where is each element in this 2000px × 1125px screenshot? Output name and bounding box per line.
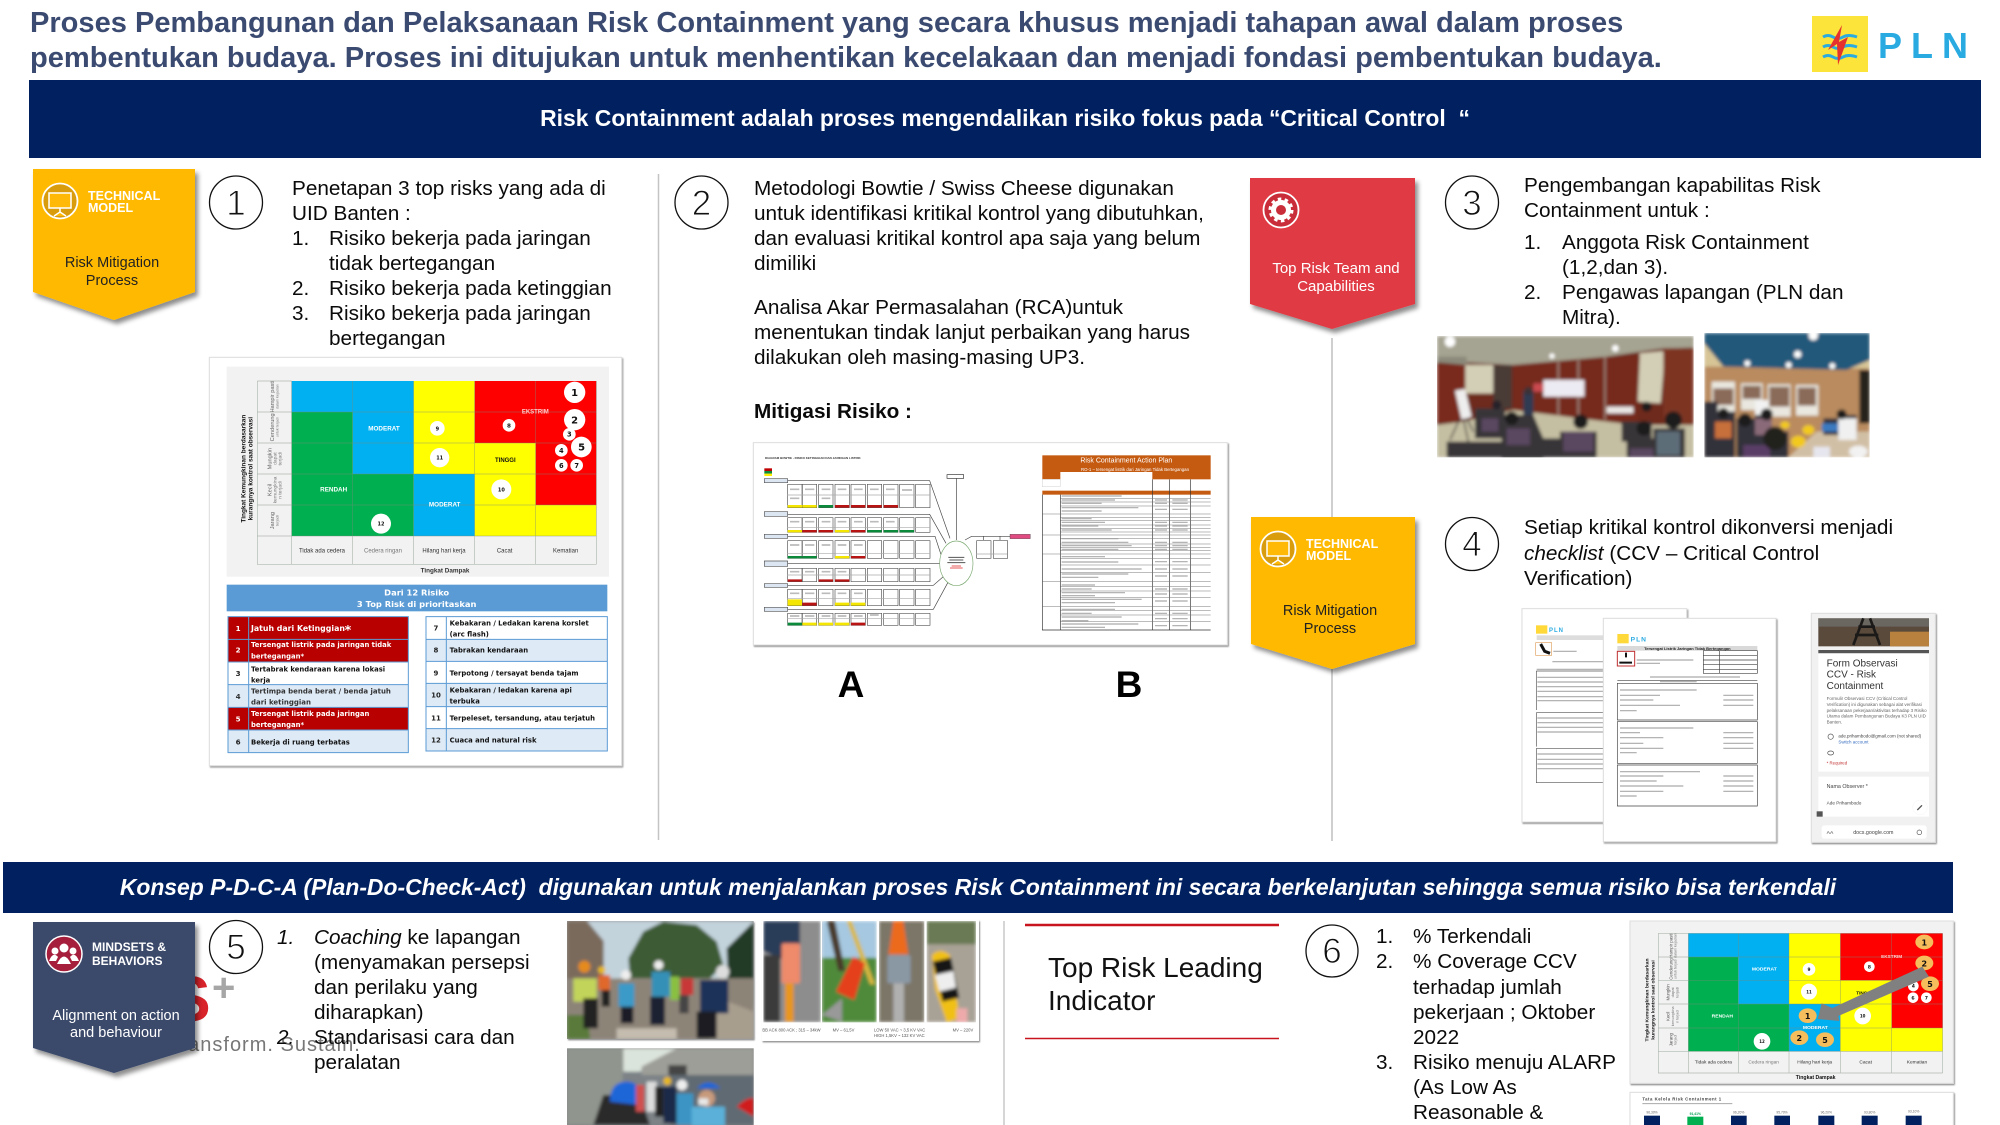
chart: matrix cells [241,381,596,574]
label: B: B [1116,664,1142,705]
chart: matrix cells: n terjadi [277,481,283,499]
step number 4: 4 [1462,525,1482,564]
panel: technical model badge 1: MODEL [88,201,134,215]
title: Proses Pembangunan dan Pelaksanaan Risk Containment yang secara khusus menjadi tahapan awal dalam proses [30,7,1623,39]
chart: matrix cells: 7 [1925,995,1928,1001]
text block: step 2: Metodologi Bowtie / Swiss Cheese digunakan [754,177,1174,200]
table: risks 7 to 12: 8 [434,647,439,655]
chart: top risk bars: 93,80% [1864,1111,1875,1115]
table: risks 1 to 6: 4 [236,692,241,701]
chart: matrix cells: RENDAH [320,486,348,493]
chart: matrix cells: Tingkat Kemungkinan berdasarkan [241,415,248,523]
chart: matrix cells: Hampir pasti [270,381,276,413]
chart: matrix cells: Cacat [1859,1060,1873,1066]
table: risks 1 to 6: dari ketinggian [251,698,311,706]
panel: technical model badge 2: Process [1304,621,1356,637]
chart: matrix cells: Hilang hari kerja [422,548,466,554]
table: risks 7 to 12: 10 [431,692,441,700]
text block: step 2 [754,177,1204,369]
chart: matrix cells [1644,933,1943,1081]
text block: step 2: dan evaluasi kritikal kontrol apa saja yang belum [754,227,1200,250]
table: risks 7 to 12: Terpeleset, tersandung, atau terjatuh [450,714,595,722]
form: google form on phone: ade.prihambodo@gmail.com (not shared) [1838,733,1922,738]
table: risks 1 to 6: Jatuh dari Ketinggian [250,624,345,633]
panel: top risk team badge: Capabilities [1297,278,1375,295]
banner: risk containment definition: Risk Containment adalah proses mengendalikan risiko fokus pada “Critical Control “ [540,105,1470,131]
form: google form on phone: Formulir Observasi CCV (Critical Control [1827,696,1907,701]
background fragment: 3S plus sustain logo: S [168,963,211,1035]
background fragment: 3S plus sustain logo [168,963,361,1056]
chart: matrix cells: terjadi [275,515,280,526]
chart: bowtie diagram [764,456,1030,625]
panel: top risk team badge: Top Risk Team and [1272,260,1400,277]
table: risks 1 to 6: Tertabrak kendaraan karena lokasi [251,665,385,673]
chart: matrix cells: kurangnya kontrol saat observasi [1650,960,1656,1040]
chart: matrix cells: Jarang [1668,1032,1673,1046]
background fragment: 3S plus sustain logo: Transform. Sustain. [168,1034,361,1056]
text block: step 5: (menyamakan persepsi [314,951,530,974]
text block: step 2: untuk identifikasi kritikal kontrol yang dibutuhkan, [754,202,1204,225]
chart: matrix cells: 2 [1922,959,1927,968]
chart: matrix cells: MODERAT [368,425,400,432]
chart: matrix cells: 7 [574,462,579,470]
banner: risk containment definition [29,80,1981,158]
title: pembentukan budaya. Proses ini ditujukan untuk menhentikan kecelakaan dan menjadi fondasi pembentukan budaya. [30,42,1662,74]
text block: step 4: checklist (CCV – Critical Control [1524,542,1819,565]
chart: matrix cells: Cenderung [270,413,276,441]
banner: pdca [3,862,1953,913]
logo: PLN: PLN [1878,25,1977,66]
text block: step 3: (1,2,dan 3). [1562,256,1668,279]
text block: step 6: 2022 [1413,1026,1459,1049]
table: risks 7 to 12: Kebakaran / ledakan karena api [450,687,572,695]
chart: bowtie diagram: DIAGRAM BOWTIE - RISIKO KETINGGIAN DAN JARINGAN LISTRIK [765,456,862,460]
label: A: A [838,664,864,705]
document: checklist front: PLN [1631,636,1647,643]
table: risks 1 to 6: Bekerja di ruang terbatas [251,738,350,746]
document: checklist front: Tersengat Listrik Jaringan Tidak Bertegangan [1644,646,1731,651]
text block: step 6: % Terkendali [1413,925,1531,948]
table: risks 7 to 12: (arc flash) [450,630,489,638]
chart: top risk bars: 96,20% [1733,1111,1744,1115]
table: risks 1 to 6: Tertimpa benda berat / benda jatuh [251,688,391,696]
chart: matrix cells: Cacat [497,548,513,554]
step number 6: 6 [1322,932,1342,971]
text block: step 2: dilakukan oleh masing-masing UP3. [754,346,1085,369]
photo: voltage detectors [762,920,979,1041]
chart: matrix cells: 5 [1927,980,1933,989]
form: google form on phone: Verification) ini digunakan sebagai alat verifikasi [1827,702,1922,707]
chart: matrix cells: terjadi [1674,987,1679,998]
text block: step 2: dimiliki [754,252,816,275]
photo: voltage detectors: BB ACK 800 ACK ; 315 – 34kW [762,1027,821,1032]
panel: risk matrix after mitigation [1630,921,1953,1083]
chart: matrix cells: 4 [1912,984,1916,990]
chart: matrix cells: 9 [436,426,440,432]
text block: step 5: peralatan [314,1051,401,1074]
table: risks 1 to 6: 5 [236,714,241,723]
text block: step 6 [1376,925,1616,1124]
panel: bowtie diagram and action plan [753,443,1227,645]
chart: matrix cells: kurangnya kontrol saat observasi [248,417,255,520]
chart: matrix cells: EKSTRIM [1881,954,1902,959]
text block: step 3: Containment untuk : [1524,199,1710,222]
chart: matrix cells: Jarang [270,512,276,529]
table: risks 1 to 6: 2 [236,646,241,655]
text block: step 5 [276,926,530,1074]
text block: step 6: 1. [1376,925,1393,948]
table: risk containment action plan [1042,455,1211,630]
chart: matrix cells: 2 [571,415,578,426]
chart: matrix cells: EKSTRIM [522,409,549,415]
panel: technical model badge 1: Process [86,273,138,289]
text block: step 1: Risiko bekerja pada jaringan [329,302,591,325]
panel: mindsets and behaviors badge: BEHAVIORS [92,954,162,968]
text block: step 1: 2. [292,277,309,300]
divider: lower section [1003,921,1005,1125]
step number 6 [1306,925,1358,977]
table: risks 1 to 6: 6 [236,737,241,746]
chart: matrix cells: Tidak ada cedera [1695,1060,1732,1066]
photo: meeting room [1704,331,1870,458]
table: risks 7 to 12 [426,617,607,751]
form: google form on phone: Ade Prihambodo [1827,801,1862,806]
chart: matrix cells: Tingkat Dampak [1796,1075,1836,1081]
panel: technical model badge 1: TECHNICAL [88,189,161,203]
table: risks 1 to 6: 3 [236,669,241,678]
panel: technical model badge 1: Risk Mitigation [65,255,159,271]
chart: matrix cells: Hampir pasti [1668,933,1673,958]
chart: matrix cells: MODERAT [1752,967,1777,973]
table: risks 7 to 12: 12 [431,737,441,745]
text block: step 6: 2. [1376,950,1393,973]
chart: matrix cells: MODERAT [429,502,461,509]
form: google form on phone: AA [1827,830,1834,836]
text block: step 5: 1. [277,926,294,949]
step number 2 [675,176,728,229]
table header: Dari 12 Risiko [384,587,449,597]
document: checklist front [1603,618,1776,842]
chart: matrix cells: TINGGI [495,458,516,464]
chart: matrix cells: 1 [1805,1012,1810,1021]
chart: matrix cells: 12 [1759,1039,1765,1044]
form: google form on phone: CCV - Risk [1827,670,1876,681]
table: risks 7 to 12: Tabrakan kendaraan [450,647,528,655]
text block: step 1: Penetapan 3 top risks yang ada di [292,177,606,200]
chart: matrix cells: Cedera ringan [1748,1060,1779,1066]
table: risks 7 to 12: 7 [434,625,439,633]
step number 4 [1446,518,1498,570]
step number 5 [210,920,262,974]
photo: field coaching [567,921,754,1039]
callout: top risk leading indicator [1025,925,1279,1038]
text block: step 3: Anggota Risk Containment [1562,231,1809,254]
text block: step 1: Risiko bekerja pada jaringan [329,227,591,250]
chart: matrix cells: 9 [1807,967,1811,973]
chart: matrix cells: n terjadi [1675,1010,1679,1023]
panel: mindsets and behaviors badge [33,922,195,1073]
form: google form on phone: Banten. [1827,720,1842,725]
chart: matrix cells: 4 [559,447,564,455]
form: google form on phone: docs.google.com [1853,830,1894,836]
form: google form on phone: Switch account [1838,739,1869,744]
banner: pdca: Konsep P-D-C-A (Plan-Do-Check-Act) digunakan untuk menjalankan proses Risk Containment ini secara berkelanjutan sehingga semua risiko bisa terkendali [120,874,1837,900]
panel: mindsets and behaviors badge: Alignment on action [52,1008,180,1024]
text block: step 5: dan perilaku yang [314,976,478,999]
chart: matrix cells: terjadi [1674,1035,1678,1045]
text block: step 1: bertegangan [329,327,446,350]
text block: step 1: 1. [292,227,309,250]
panel: top risk team badge [1250,178,1415,329]
table: risks 7 to 12: Cuaca and natural risk [450,737,537,745]
chart: top risk bars: 96,30% [1646,1111,1658,1115]
heading: mitigasi risiko: Mitigasi Risiko : [754,400,912,423]
panel: risk matrix and top risk table [209,357,622,766]
chart: matrix cells: Tingkat Dampak [421,567,470,574]
text block: step 3: Pengembangan kapabilitas Risk [1524,174,1821,197]
step number 5: 5 [226,928,246,967]
text block: step 5: Standarisasi cara dan [314,1026,515,1049]
step number 2: 2 [692,184,711,223]
text block: step 6: pekerjaan ; Oktober [1413,1001,1595,1024]
chart: matrix cells: kemungkina [1671,1006,1675,1026]
table: risks 1 to 6: Tersengat listrik pada jaringan tidak [251,641,392,649]
chart: matrix cells: 6 [559,462,564,470]
document: checklist back [1522,609,1687,822]
chart: matrix cells: untuk terjadi [1674,959,1678,979]
chart: top risk bars: Tata Kelola Risk Containment 1 [1642,1097,1722,1102]
chart: matrix cells: Tidak ada cedera [299,548,346,554]
text block: step 6: Risiko menuju ALARP [1413,1051,1616,1074]
chart: top risk bars [1630,1092,1953,1125]
table: risks 1 to 6 [228,617,408,753]
chart: matrix cells: Cedera ringan [364,548,402,554]
photo: voltage detectors: MV – 61,5V [833,1027,855,1032]
chart: top risk bars: 95,70% [1776,1111,1788,1115]
text block: step 5: 2. [276,1026,294,1049]
chart: matrix cells: Kematian [1907,1060,1928,1066]
panel: technical model badge 2: Risk Mitigation [1283,603,1377,619]
chart: matrix cells: 11 [1806,989,1812,994]
table: risks 7 to 12: 11 [431,714,441,722]
chart: matrix cells: 1 [1922,938,1927,947]
chart: matrix cells: dalam kejadian [276,384,280,409]
panel: mindsets and behaviors badge: MINDSETS & [92,940,166,954]
form: google form on phone [1811,613,1935,842]
chart: matrix cells: Tingkat Kemungkinan berdasarkan [1644,958,1650,1042]
chart: matrix cells: Mungkin [1666,984,1671,1001]
chart: matrix cells: untuk terjadi [276,417,280,437]
table: risks 1 to 6: kerja [251,676,271,684]
chart: matrix cells: 8 [507,424,511,430]
chart: matrix cells: Mungkin [267,448,273,469]
chart: matrix cells: terjadi [277,452,283,465]
table: risks 1 to 6: * [345,622,352,637]
panel: technical model badge 2: MODEL [1306,549,1352,563]
text block: step 3: 2. [1524,281,1541,304]
photo: voltage detectors: MV – 220V [953,1027,973,1032]
text block: step 3: 1. [1524,231,1541,254]
callout: top risk leading indicator: Indicator [1048,985,1155,1016]
text block: step 4: Setiap kritikal kontrol dikonversi menjadi [1524,516,1893,539]
chart: matrix cells: Hilang hari kerja [1797,1060,1832,1066]
chart: matrix cells: kemungkina [272,476,278,503]
panel: technical model badge 2 [1251,517,1415,669]
title [30,7,1662,74]
logo: PLN [1812,16,1977,72]
table: risks 7 to 12: 9 [434,669,439,677]
chart: matrix cells: 5 [1822,1036,1828,1045]
chart: matrix cells: 3 [567,431,572,439]
panel: technical model badge 1 [33,169,195,320]
panel: technical model badge 2: TECHNICAL [1306,537,1379,551]
table header: 3 Top Risk di prioritaskan [357,599,476,609]
text block: step 2: menentukan tindak lanjut perbaikan yang harus [754,321,1190,344]
callout: top risk leading indicator: Top Risk Leading [1048,952,1263,983]
photo: voltage detectors: HIGH 1,5KV ~ 132 KV VAC [874,1033,925,1038]
step number 3 [1446,176,1498,229]
text block: step 6: terhadap jumlah [1413,976,1562,999]
table: risk containment action plan: RO-1 – tersengat listrik dari Jaringan Tidak Bertegangan [1081,467,1190,472]
chart: matrix cells: dapat [1670,986,1675,997]
text block: step 1: tidak bertegangan [329,252,495,275]
photo: training room [1437,336,1694,458]
text block: step 6: (As Low As [1413,1076,1517,1099]
table: risks 1 to 6: bertegangan* [251,652,304,660]
photo: voltage detectors: LOW 50 VAC ~ 3,5 KV VAC [874,1027,925,1032]
step number 3: 3 [1462,184,1482,223]
chart: matrix cells: 10 [498,487,505,493]
form: google form on phone: Containment [1827,681,1884,692]
text block: step 3 [1524,174,1843,329]
text block: step 6: 3. [1376,1051,1393,1074]
chart: matrix cells: TINGGI [1856,990,1872,995]
photo: helmet team [567,1048,754,1125]
chart: matrix cells: Cenderung [1668,958,1673,980]
chart: matrix cells: 6 [1911,995,1915,1001]
chart: matrix cells: 11 [436,456,444,462]
text block: step 4: Verification) [1524,567,1632,590]
form: google form on phone: Utama dalam Pembangunan Budaya K3 PLN UID [1827,714,1927,719]
chart: matrix cells: 12 [378,522,385,528]
text block: step 1: 3. [292,302,309,325]
table: risks 1 to 6: bertegangan* [251,721,304,729]
table: risks 1 to 6: 1 [236,624,241,633]
form: google form on phone: Nama Observer * [1827,784,1868,790]
chart: matrix cells: Kecil [267,484,273,496]
chart: matrix cells: 10 [1860,1013,1866,1018]
table: risks 7 to 12: terbuka [450,697,480,705]
text block: step 3: Pengawas lapangan (PLN dan [1562,281,1843,304]
form: google form on phone: Form Observasi [1827,659,1898,670]
text block: step 4 [1524,516,1893,590]
chart: matrix cells: dapat [272,452,278,465]
chart: top risk bars: 93,10% [1908,1110,1919,1114]
table: risks 7 to 12: Terpotong / tersayat benda tajam [450,669,579,677]
background fragment: 3S plus sustain logo: + [212,966,235,1010]
table: risks 1 to 6: Tersengat listrik pada jaringan [251,710,369,718]
step number 1: 1 [226,184,246,223]
chart: matrix cells: 5 [578,443,585,454]
chart: matrix cells: 8 [1868,964,1871,970]
table header [227,585,607,611]
chart: matrix cells: Kematian [553,548,578,554]
step number 1 [210,176,262,229]
chart: matrix cells: RENDAH [1712,1013,1733,1019]
chart: matrix cells: 2 [1797,1034,1802,1043]
chart: matrix cells: 1 [571,388,578,399]
arrow: risk moving down [1818,967,1929,1021]
chart: matrix cells: dalam kejadian [1674,933,1678,958]
text block: step 6: Reasonable & [1413,1101,1544,1124]
text block: step 1: Risiko bekerja pada ketinggian [329,277,612,300]
table: risks 7 to 12: Kebakaran / Ledakan karena korslet [450,620,590,628]
text block: step 3: Mitra). [1562,306,1621,329]
text block: step 5: Coaching ke lapangan [314,926,521,949]
text block: step 6: % Coverage CCV [1413,950,1577,973]
text block: step 1: UID Banten : [292,202,411,225]
text block: step 2: Analisa Akar Permasalahan (RCA)untuk [754,296,1124,319]
chart: matrix cells: Kecil [1666,1012,1671,1021]
connector line between badges [1331,338,1333,841]
panel: mindsets and behaviors badge: and behaviour [70,1025,162,1041]
panel: checklist documents and form [1522,609,1935,842]
chart: matrix cells: MODERAT [1803,1025,1828,1031]
form: google form on phone: pelaksanaan pekerjaan/aktivitas terhadap 3 Risiko [1827,708,1927,713]
document: checklist back: PLN [1549,628,1564,634]
form: google form on phone: * Required [1827,760,1848,765]
chart: top risk bars: 96,20% [1821,1111,1832,1115]
chart: top risk bars: 91,41% [1690,1112,1701,1116]
text block: step 5: diharapkan) [314,1001,424,1024]
table: risk containment action plan: Risk Containment Action Plan [1080,457,1172,464]
text block: step 1 [292,177,612,350]
vertical dividers [658,174,660,840]
